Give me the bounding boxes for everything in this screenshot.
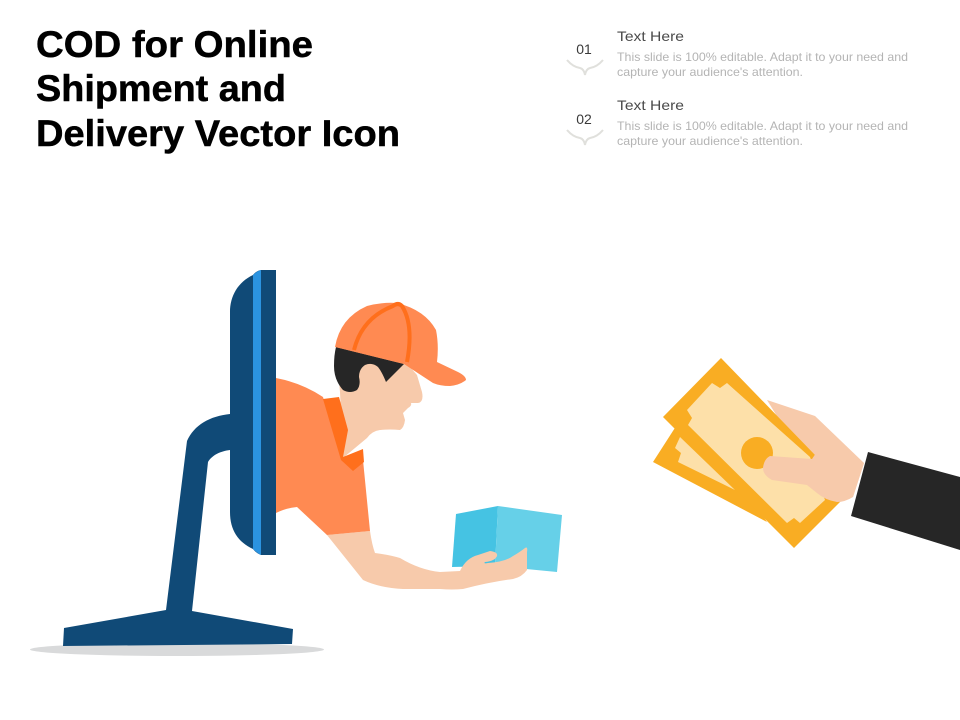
front banknote inner — [687, 383, 825, 523]
item body 01: This slide is 100% editable. Adapt it to your need and — [617, 50, 908, 64]
package box right face — [495, 506, 562, 572]
title — [36, 24, 400, 154]
number 01: 01 — [576, 41, 592, 57]
package box left face — [452, 506, 498, 567]
title: Delivery Vector Icon — [36, 113, 400, 154]
cap seams — [354, 304, 410, 362]
monitor stand — [63, 414, 293, 646]
illustration: delivery man — [276, 303, 562, 590]
front banknote — [663, 358, 852, 548]
icon: chevron swoosh 02 — [567, 130, 603, 145]
illustration: hand holding cash — [653, 358, 960, 550]
hand back — [767, 400, 864, 497]
illustration: computer monitor — [30, 270, 324, 656]
coin — [741, 437, 773, 469]
icon: chevron swoosh 01 — [567, 60, 603, 75]
monitor blue stripe — [253, 270, 261, 555]
item body 02: This slide is 100% editable. Adapt it to your need and — [617, 119, 908, 133]
suit sleeve — [851, 452, 960, 550]
shirt — [276, 378, 370, 535]
title: COD for Online — [36, 24, 313, 65]
arm — [327, 531, 527, 590]
back banknote inner — [675, 437, 735, 490]
cap — [335, 303, 466, 386]
title: Shipment and — [36, 68, 286, 109]
neck and face — [336, 350, 422, 458]
back banknote — [653, 420, 767, 522]
item heading 01: Text Here — [617, 28, 684, 44]
item body 01: capture your audience's attention. — [617, 65, 803, 79]
item body 02 — [617, 119, 908, 148]
shirt collar — [323, 397, 364, 471]
hair — [334, 347, 404, 392]
list item 02 — [567, 97, 908, 148]
number 02: 02 — [576, 111, 592, 127]
thumb and palm — [763, 445, 864, 502]
monitor screen body — [230, 270, 276, 555]
item body 01 — [617, 50, 908, 79]
monitor shadow — [30, 643, 324, 656]
item heading 02: Text Here — [617, 97, 684, 113]
list item 01 — [567, 28, 908, 79]
item body 02: capture your audience's attention. — [617, 134, 803, 148]
